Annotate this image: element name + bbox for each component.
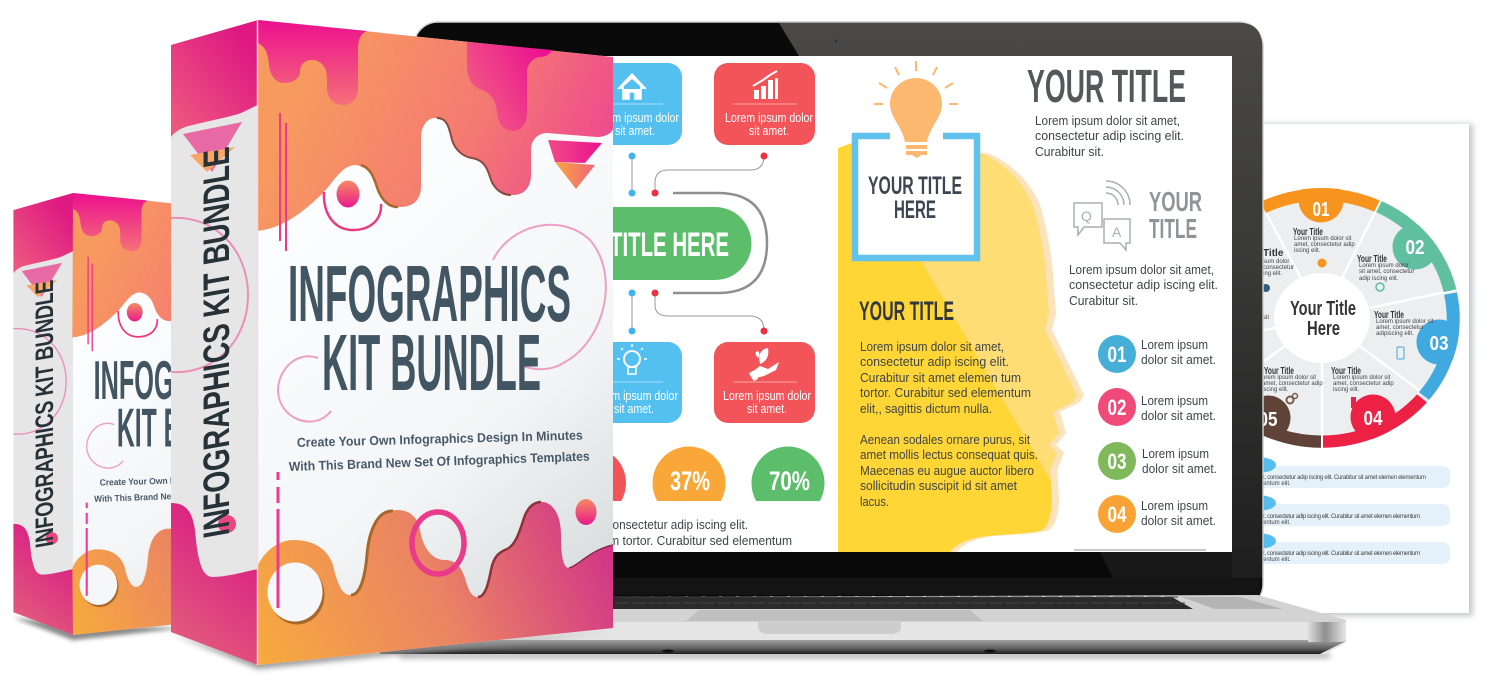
laptop base	[380, 595, 1346, 654]
heading: your title small	[1149, 192, 1202, 238]
bottom blob	[257, 502, 613, 665]
wheel chart: 01	[1312, 199, 1330, 221]
head paragraphs: lacus.	[860, 494, 889, 509]
text block: consectetur adip iscing elit.	[1035, 128, 1184, 143]
card: bulb: sit amet.	[614, 401, 654, 416]
head paragraphs: Maecenas eu augue auctor libero	[860, 463, 1034, 478]
green title pill	[613, 207, 752, 280]
box side face	[171, 20, 258, 665]
side title: INFOGRAPHICS KIT BUNDLE	[195, 145, 237, 541]
heading: your title small: YOUR	[1149, 186, 1202, 217]
small back box: KIT BUNDLE	[117, 396, 267, 458]
card: bulb	[613, 342, 682, 423]
head paragraphs: Aenean sodales ornare purus, sit	[860, 432, 1030, 447]
wheel chart: 03	[1430, 333, 1448, 355]
wheel chart: Lorem ipsum dolor sit	[1294, 236, 1352, 242]
card: hand and leaf: Lorem ipsum dolor	[723, 388, 812, 403]
card: hand and leaf	[714, 342, 815, 423]
numbered list	[1098, 335, 1217, 533]
bottom circles	[268, 499, 596, 624]
percent circles	[613, 446, 824, 501]
blue title frame	[855, 136, 977, 258]
wheel chart: Title	[1263, 248, 1284, 259]
text rows: t, consectetur adip iscing elit. Curabitur sit amet elemen elementum	[1263, 551, 1420, 557]
box title: KIT BUNDLE	[322, 318, 541, 407]
wheel chart: adipiscing elit.	[1376, 331, 1414, 337]
head shape	[838, 143, 1084, 552]
laptop	[380, 22, 1346, 658]
right panel: head infographic	[838, 60, 1218, 552]
heading: your title: YOUR TITLE	[1027, 60, 1186, 112]
numbered list: 02	[1108, 395, 1126, 420]
small back box: With This Brand New Set Of Infographics Templates	[94, 487, 300, 504]
head paragraphs: sollicitudin suscipit id sit amet	[860, 478, 1017, 493]
wheel chart: Lorem ipsum dolor	[1359, 263, 1409, 269]
card: chart: sit amet.	[749, 123, 789, 138]
text rows: entum elit.	[1263, 557, 1291, 563]
numbered list: 01	[1108, 342, 1126, 367]
top blob	[257, 20, 613, 231]
card: chart: Lorem ipsum dolor	[725, 110, 814, 125]
box front face	[257, 20, 613, 665]
numbered list: dolor sit amet.	[1142, 461, 1217, 476]
heading: your title small: TITLE	[1149, 213, 1197, 244]
wheel chart: 04	[1364, 408, 1383, 430]
blue title frame: YOUR TITLE	[868, 172, 962, 200]
blue title frame: HERE	[894, 196, 936, 224]
wheel chart: iscing elit.	[1294, 248, 1321, 254]
wheel chart: Lorem ipsum dolor sit	[1376, 319, 1434, 325]
wheel chart: Your Title	[1357, 254, 1387, 265]
box shadow	[171, 632, 613, 669]
text block	[1070, 264, 1217, 305]
main front box	[171, 20, 613, 669]
wheel chart: 05	[1258, 409, 1278, 431]
text block: Lorem ipsum dolor sit amet,	[1069, 262, 1214, 277]
wheel chart: iscing elit.	[1333, 387, 1360, 393]
box front face: INFOGRAPHICS	[288, 249, 571, 338]
text block: consectetur adip iscing elit.	[1069, 277, 1218, 292]
ring and ball	[324, 180, 381, 230]
numbered list: 03	[1108, 449, 1126, 474]
numbered list: Lorem ipsum	[1142, 446, 1209, 461]
text rows	[1264, 458, 1450, 564]
green title pill: TITLE HERE	[610, 226, 729, 264]
card: hand and leaf: sit amet.	[747, 401, 787, 416]
wheel chart: sit amet, consectetur	[1359, 269, 1414, 275]
wheel chart: Here	[1307, 318, 1340, 340]
numbered list: 04	[1108, 502, 1127, 527]
head paragraphs: elit,, sagittis dictum nulla.	[860, 401, 992, 416]
numbered list: Lorem ipsum	[1141, 498, 1208, 513]
card: house	[613, 63, 682, 145]
text rows: t, consectetur adip iscing elit. Curabitur sit amet elemen elementum	[1263, 475, 1426, 481]
text block: Curabitur sit.	[1069, 293, 1138, 308]
left panel: flow diagram	[613, 63, 824, 545]
wheel chart	[1264, 188, 1460, 448]
box subtitle: Create Your Own Infographics Design In Minutes	[297, 428, 583, 450]
pink drip right	[467, 42, 552, 131]
heading in head: YOUR TITLE	[859, 296, 954, 326]
paragraph: elem tortor. Curabitur sed elementum	[593, 533, 792, 548]
numbered list: dolor sit amet.	[1141, 352, 1216, 367]
numbered list: Lorem ipsum	[1141, 393, 1208, 408]
text block: Curabitur sit.	[1035, 144, 1104, 159]
side triangles	[183, 122, 242, 172]
wheel chart: iscing elit.	[1262, 387, 1289, 393]
paragraph	[613, 520, 792, 545]
card: chart	[714, 63, 815, 145]
wheel chart: 02	[1406, 237, 1424, 259]
wheel chart: Your Title	[1374, 310, 1404, 321]
numbered list: dolor sit amet.	[1141, 408, 1216, 423]
head paragraphs: Lorem ipsum dolor sit amet,	[860, 339, 1004, 354]
text block: Lorem ipsum dolor sit amet,	[1035, 113, 1180, 128]
back sheet: wheel infographic page	[1264, 121, 1476, 619]
wheel chart: amet, consectetur adip	[1262, 381, 1323, 387]
text rows: entum elit.	[1263, 481, 1291, 487]
wheel chart: sit	[1263, 315, 1269, 321]
small back box	[13, 193, 316, 640]
head paragraphs: Curabitur sit amet elemen tum	[860, 370, 1021, 385]
wheel chart: orem ipsum dolor sit	[1262, 375, 1316, 381]
text rows: entum elit.	[1263, 520, 1291, 526]
head paragraphs	[860, 339, 1038, 509]
numbered list: dolor sit amet.	[1141, 513, 1216, 528]
thin circles	[278, 225, 606, 422]
wheel chart: Your Title	[1290, 298, 1356, 320]
box subtitle: With This Brand New Set Of Infographics Templates	[289, 449, 590, 474]
percent circles: 37%	[670, 466, 710, 496]
triangles	[548, 140, 602, 189]
blob edge shadows	[361, 118, 511, 207]
laptop shadow	[400, 653, 1330, 658]
head paragraphs: consectetur adip iscing elit.	[860, 354, 1009, 369]
numbered list: Lorem ipsum	[1141, 337, 1208, 352]
wheel chart: amet, consectetur adip	[1294, 242, 1355, 248]
card: bulb: Lorem ipsum dolor	[590, 388, 679, 403]
card: house: Lorem ipsum dolor	[591, 110, 680, 125]
box subtitle	[289, 428, 590, 474]
bottom blob edge shadows	[351, 502, 613, 597]
icon: Q and A bubbles: Q	[1081, 208, 1092, 224]
text rows: t, consectetur adip iscing elit. Curabitur sit amet elemen elementum	[1263, 514, 1420, 520]
wheel chart: consectetur	[1263, 265, 1294, 271]
wheel chart: adip iscing elit.	[1359, 276, 1399, 282]
wheel chart: Lorem ipsum dolor sit	[1333, 375, 1391, 381]
wheel chart: Your Title	[1331, 366, 1361, 377]
icon: Q and A bubbles: A	[1112, 224, 1122, 240]
connector dots	[628, 152, 768, 334]
wheel chart: Your Title	[1293, 227, 1323, 238]
screen content	[554, 60, 1218, 552]
icon: light bulb	[874, 61, 958, 158]
wheel chart: amet, consectetur	[1376, 325, 1424, 331]
box title	[288, 249, 571, 407]
connector lines	[632, 156, 767, 331]
small back box: Create Your Own Infographics Design In Minutes	[100, 472, 296, 487]
card: house: sit amet.	[615, 123, 655, 138]
icon: Q and A bubbles	[1074, 181, 1130, 250]
paragraph: Lorem consectetur adip iscing elit.	[570, 517, 748, 532]
pink drip left	[258, 20, 367, 105]
wheel chart: amet, consectetur adip	[1333, 381, 1394, 387]
laptop lid	[414, 22, 1263, 608]
small back box: INFOGRAPHICS	[94, 349, 287, 411]
text block	[1036, 116, 1183, 156]
head paragraphs: tortor. Curabitur sed elementum	[860, 385, 1031, 400]
small back box: INFOGRAPHICS KIT BUNDLE	[31, 278, 59, 550]
head paragraphs: amet mollis lectus consequat quis.	[860, 447, 1038, 462]
wheel chart: Your Title	[1264, 366, 1294, 377]
wheel chart: sum dolor	[1263, 259, 1289, 265]
percent circles: 70%	[769, 466, 810, 496]
wheel chart: ing elit.	[1263, 271, 1282, 277]
